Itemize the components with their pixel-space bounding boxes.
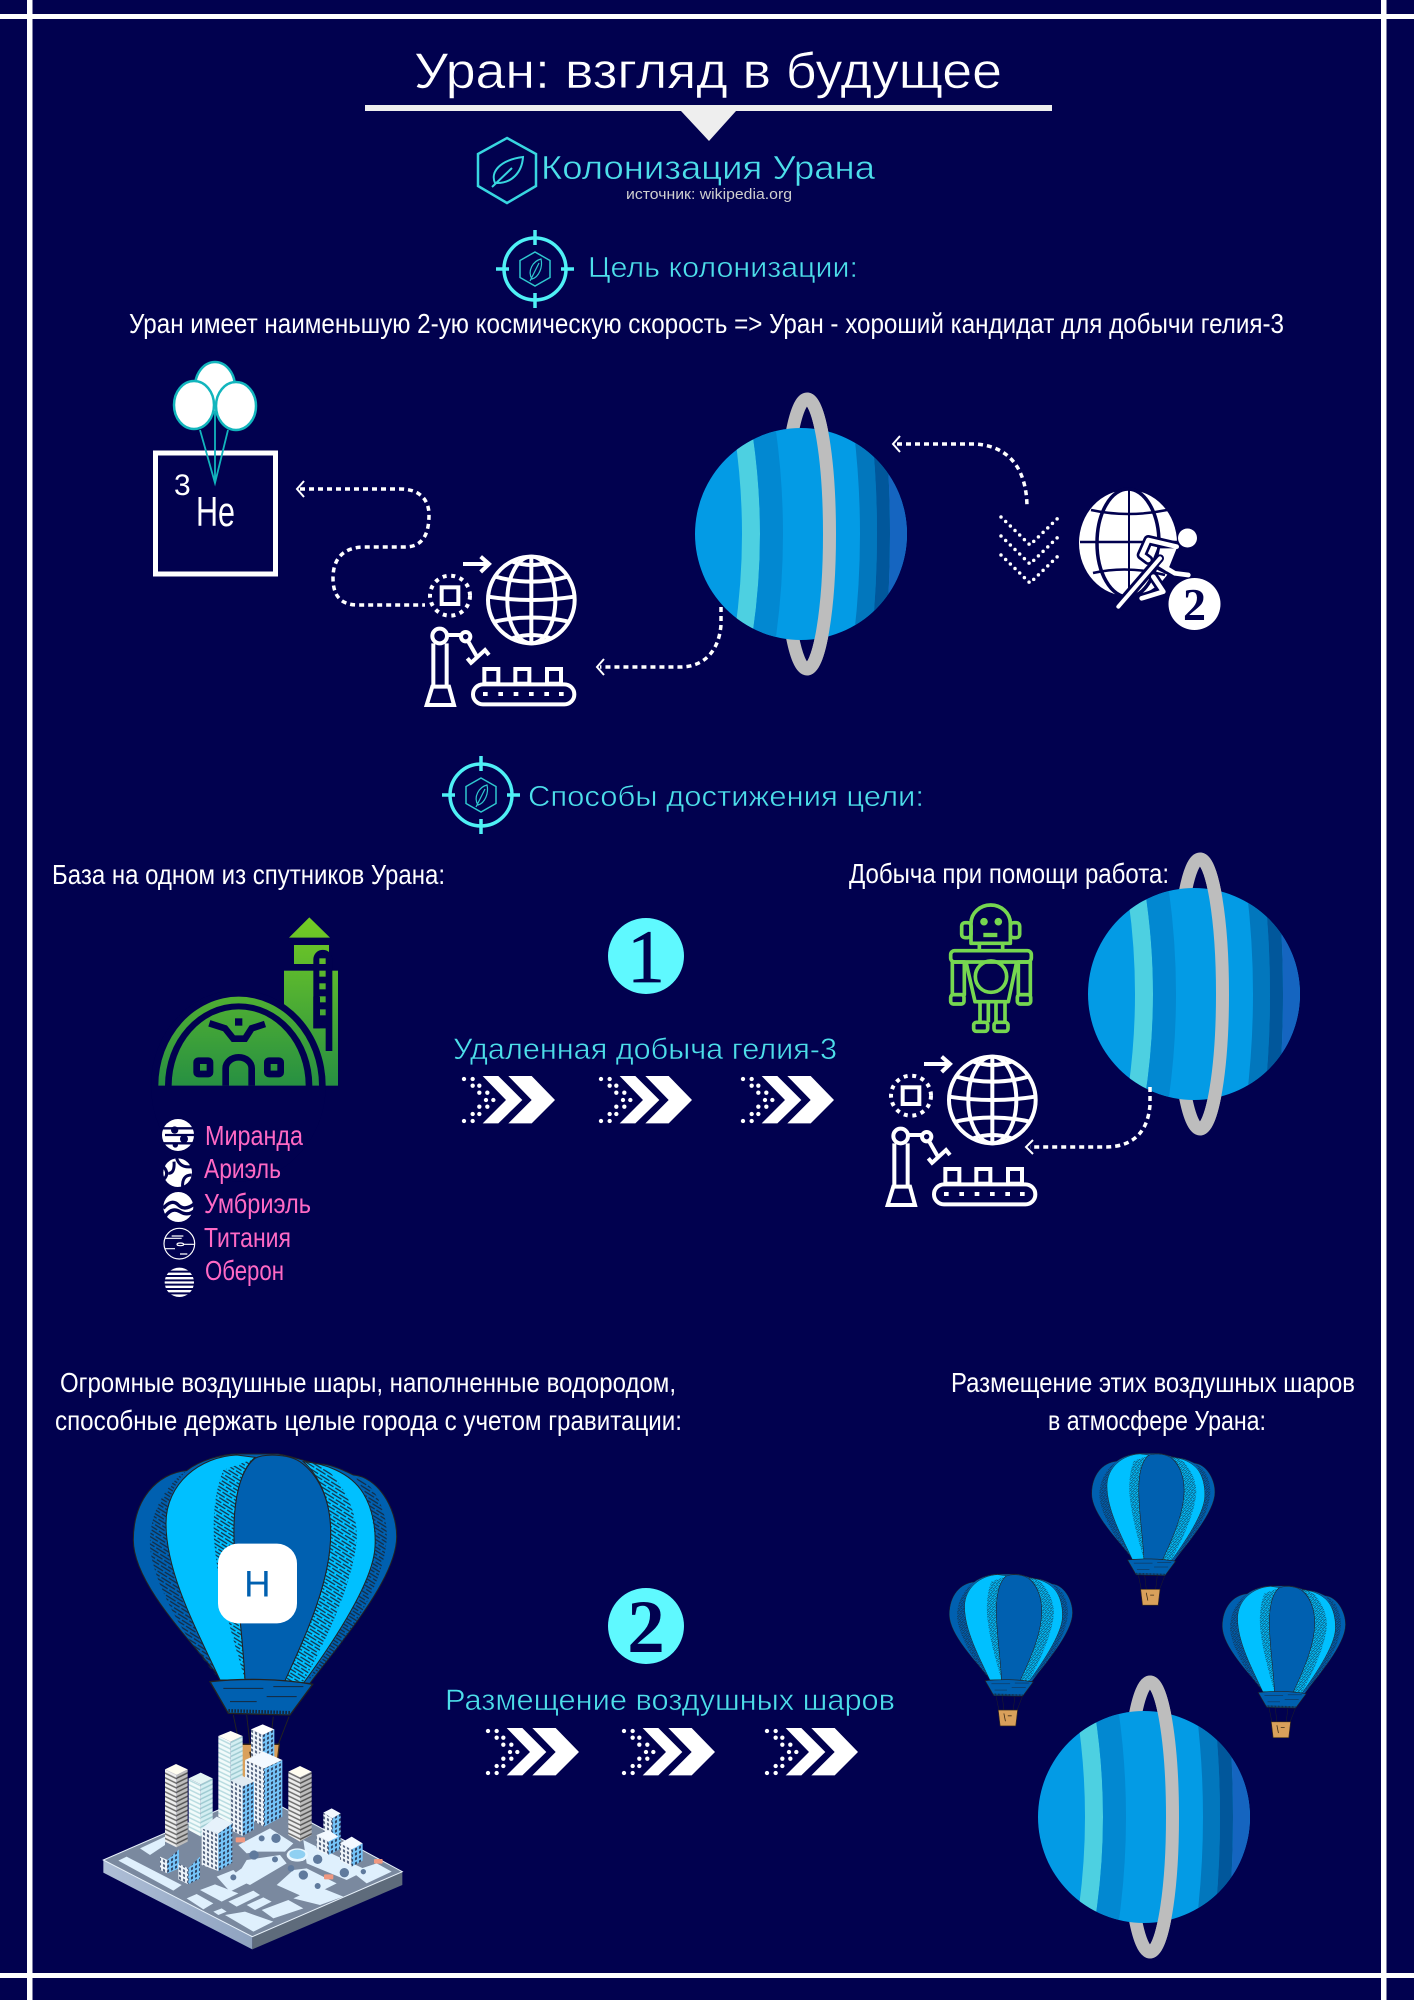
moon names: Миранда — [205, 1120, 304, 1151]
label: placement: Размещение этих воздушных шаров — [951, 1367, 1355, 1398]
icon: globe with runner and badge 2: 2 — [1183, 579, 1206, 630]
heading: Колонизация Урана: Колонизация Урана — [541, 149, 876, 186]
planet: Uranus — [1038, 1682, 1264, 1952]
icon: robotic factory and globe — [427, 557, 575, 705]
icon: green dome base — [151, 917, 338, 1181]
icon: target goal — [496, 230, 574, 308]
step 1 label: Удаленная добыча гелия-3 — [453, 1033, 837, 1066]
label: city balloons: Огромные воздушные шары, наполненные водородом, — [60, 1367, 676, 1398]
icon: Titania — [164, 1228, 195, 1259]
planet: Uranus — [695, 399, 921, 669]
heading: methods: Способы достижения цели: — [528, 781, 924, 813]
goal statement: Уран имеет наименьшую 2-ую космическую скорость => Уран - хороший кандидат для добычи гелия-3 — [129, 308, 1284, 339]
hot air balloon — [133, 1454, 397, 1778]
illustration: balloon and city — [103, 1454, 402, 1949]
helium element box — [156, 453, 276, 574]
moon names — [204, 1120, 311, 1286]
icon: balloon left — [949, 1574, 1073, 1726]
icon: balloon top — [1092, 1453, 1215, 1605]
arrows: step 2 — [486, 1728, 858, 1775]
arrows: step 1 — [462, 1076, 834, 1123]
buildings — [160, 1724, 363, 1884]
step 2 label: Размещение воздушных шаров — [445, 1684, 895, 1717]
moon names: Оберон — [205, 1255, 284, 1286]
label: city balloons second line: способные держать целые города с учетом гравитации: — [55, 1405, 682, 1436]
icon: dotted down chevrons — [1001, 517, 1059, 583]
panel: base on a moon — [52, 859, 445, 1297]
moon names: Титания — [204, 1222, 291, 1253]
arrow: planet to factory — [597, 607, 721, 675]
icon: Oberon — [163, 1268, 195, 1297]
panel: robot mining — [849, 858, 1314, 1205]
icon: balloon right — [1222, 1586, 1346, 1738]
step 2 badge — [608, 1586, 684, 1669]
step 1 badge: 1 — [627, 916, 665, 999]
arrow: planet to factory — [1026, 1087, 1150, 1154]
icon: green robot — [951, 905, 1031, 1031]
icon: Ariel — [163, 1158, 192, 1187]
icon: robotic factory and globe — [888, 1057, 1036, 1205]
icon: helium-3 element card with balloons — [156, 362, 276, 574]
title: Уран: взгляд в будущее — [414, 43, 1002, 99]
step 1 badge — [608, 916, 684, 999]
icon: hexagon leaf logo — [478, 138, 536, 203]
label: robot mining: Добыча при помощи работа: — [849, 858, 1169, 889]
arrow: factory to helium — [297, 481, 429, 605]
step 2 badge: 2 — [627, 1586, 665, 1669]
panel: city balloons — [55, 1367, 682, 1949]
isometric city — [103, 1724, 402, 1949]
moon names: Умбриэль — [204, 1188, 311, 1219]
mass number: 3 — [174, 469, 191, 502]
planet: Uranus — [1088, 859, 1314, 1129]
element symbol: He — [196, 488, 235, 535]
source note: источник: wikipedia.org — [626, 187, 792, 203]
hydrogen label: H — [244, 1564, 271, 1605]
badge 2 — [1168, 578, 1220, 630]
panel: balloons in Uranus atmosphere — [949, 1367, 1355, 1952]
title underline with pointer — [365, 105, 1052, 141]
balloons — [174, 362, 256, 483]
icon: target methods — [442, 756, 520, 834]
moon list — [162, 1119, 195, 1297]
hydrogen label — [218, 1544, 297, 1623]
label: moon base: База на одном из спутников Урана: — [52, 859, 445, 890]
label: placement second line: в атмосфере Урана: — [1048, 1405, 1266, 1436]
arrow: escape velocity to planet — [893, 436, 1027, 508]
icon: globe with runner and badge 2 — [1079, 488, 1220, 630]
moon names: Ариэль — [204, 1153, 281, 1184]
runner figure — [1118, 540, 1188, 607]
icon: Umbriel — [163, 1192, 195, 1222]
icon: Miranda — [162, 1119, 195, 1151]
heading: goal of colonization: Цель колонизации: — [588, 252, 858, 284]
